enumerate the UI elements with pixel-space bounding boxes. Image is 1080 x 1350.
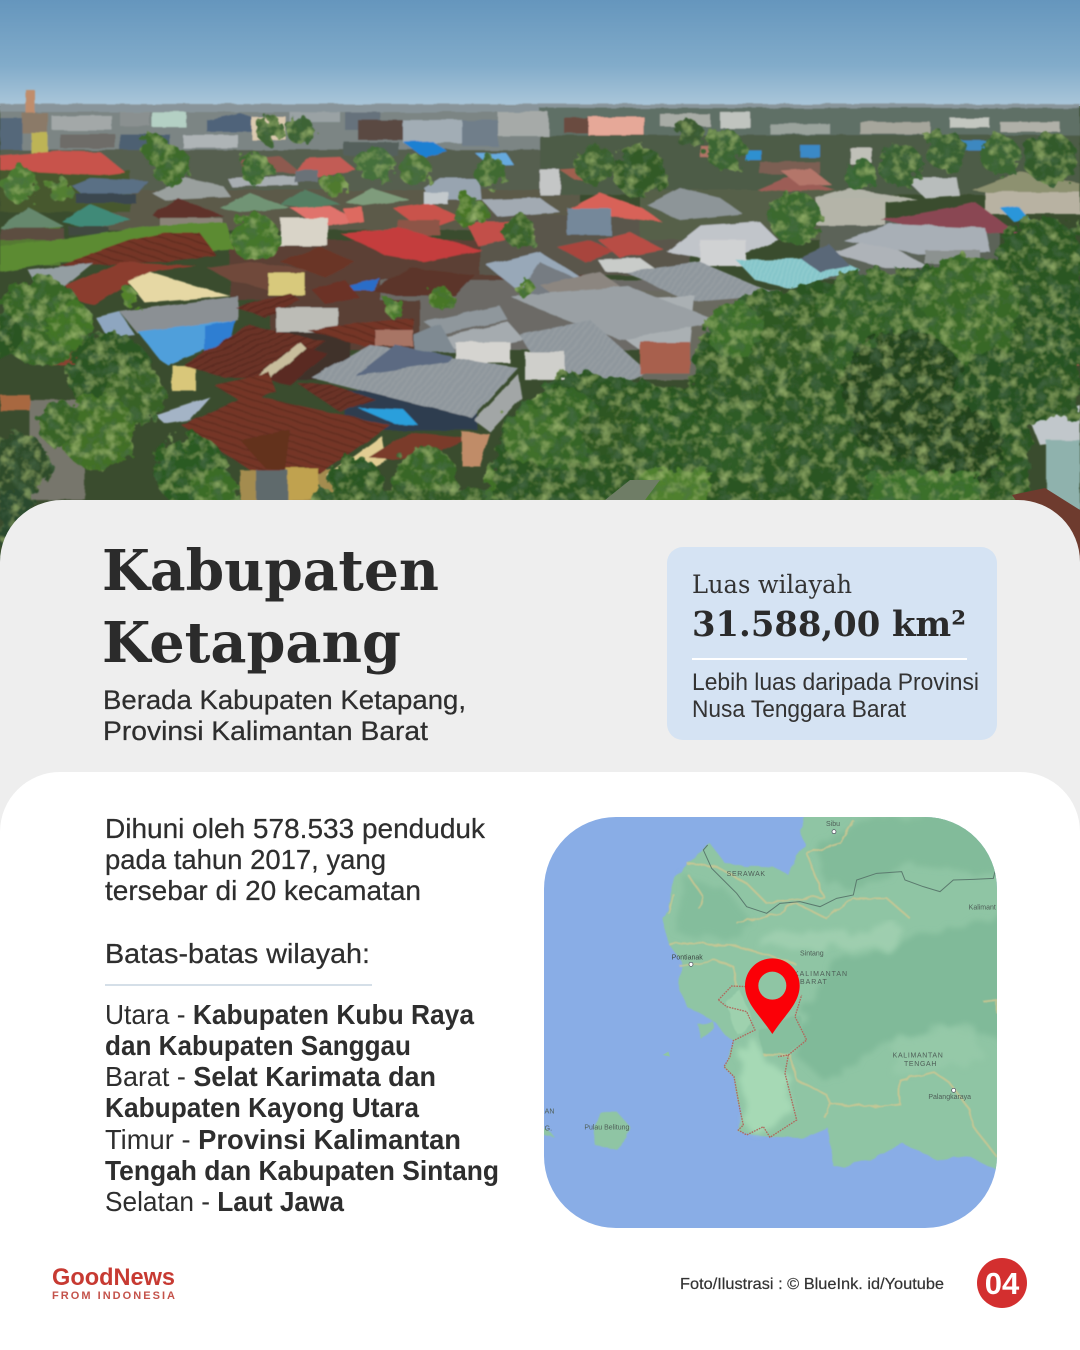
map labels: G. bbox=[545, 1126, 552, 1133]
map labels: Sintang bbox=[800, 950, 824, 957]
map labels: KALIMANTAN bbox=[893, 1052, 943, 1059]
callout: area: Luas wilayah bbox=[692, 570, 852, 599]
text block: borders list: dan Kabupaten Sanggau bbox=[105, 1030, 411, 1061]
title bbox=[102, 538, 439, 676]
map labels: Pulau Belitung bbox=[584, 1124, 629, 1131]
map labels: KALIMANTAN bbox=[794, 971, 848, 978]
large grey roof bbox=[345, 390, 477, 430]
text block: population: tersebar di 20 kecamatan bbox=[105, 875, 421, 906]
upper brown roofs bbox=[183, 325, 327, 378]
page number: 04 bbox=[985, 1266, 1020, 1301]
page number bbox=[977, 1258, 1027, 1308]
mid roofs, left bbox=[57, 233, 217, 266]
photo credit: Foto/Ilustrasi : © BlueInk. id/Youtube bbox=[680, 1276, 944, 1293]
callout: area bbox=[667, 547, 997, 740]
title: Ketapang bbox=[102, 610, 401, 676]
map labels: Pontianak bbox=[672, 954, 703, 961]
subtitle: Provinsi Kalimantan Barat bbox=[103, 716, 429, 746]
mid roofs, centre and right bbox=[485, 251, 580, 289]
text block: borders list: Kabupaten Kayong Utara bbox=[105, 1092, 419, 1123]
subtitle: Berada Kabupaten Ketapang, bbox=[103, 685, 466, 715]
map labels bbox=[545, 821, 996, 1133]
heading: borders: Batas-batas wilayah: bbox=[105, 938, 370, 969]
country border bbox=[703, 845, 995, 913]
map labels: BARAT bbox=[800, 979, 828, 986]
text block: population: pada tahun 2017, yang bbox=[105, 844, 386, 875]
left trees bbox=[0, 278, 86, 366]
map labels: TENGAH bbox=[904, 1061, 937, 1068]
map labels: Kalimant bbox=[969, 904, 996, 911]
callout: area: Lebih luas daripada Provinsi bbox=[692, 669, 979, 696]
land mass bbox=[540, 807, 1014, 1173]
title: Kabupaten bbox=[102, 538, 439, 604]
map labels: Sibu bbox=[826, 821, 840, 828]
filler between houses bbox=[0, 150, 600, 190]
logo: FROM INDONESIA bbox=[52, 1290, 175, 1302]
callout: area: 31.588,00 km² bbox=[692, 604, 966, 645]
icon: location pin bbox=[745, 958, 800, 1034]
map bbox=[540, 807, 1014, 1228]
far city band bbox=[0, 102, 1080, 114]
map labels: SERAWAK bbox=[727, 871, 766, 878]
panel: details bbox=[0, 772, 1080, 1350]
text block: borders list: Tengah dan Kabupaten Sintang bbox=[105, 1155, 499, 1186]
regency dotted boundary bbox=[718, 986, 807, 1137]
far houses bbox=[0, 170, 130, 212]
road and lawn details bbox=[605, 480, 660, 500]
logo: GoodNews bbox=[52, 1264, 175, 1291]
light regency area bbox=[737, 1043, 788, 1130]
subtitle bbox=[103, 685, 466, 746]
text block: borders list bbox=[105, 999, 499, 1217]
field bbox=[0, 222, 235, 272]
text block: borders list: Barat - Selat Karimata dan bbox=[105, 1061, 436, 1092]
roads bbox=[668, 820, 997, 1157]
map labels: AN bbox=[545, 1108, 554, 1115]
callout: area: Nusa Tenggara Barat bbox=[692, 696, 906, 723]
blue home bbox=[96, 312, 135, 338]
panel: title area bbox=[0, 500, 1080, 840]
text block: borders list: Timur - Provinsi Kalimantan bbox=[105, 1124, 461, 1155]
text block: borders list: Selatan - Laut Jawa bbox=[105, 1186, 344, 1217]
text block: population: Dihuni oleh 578.533 penduduk bbox=[105, 813, 486, 844]
lower brown roofs bbox=[155, 397, 210, 424]
text block: borders list: Utara - Kabupaten Kubu Raya bbox=[105, 999, 474, 1030]
map labels: Palangkaraya bbox=[928, 1094, 971, 1101]
right-edge houses bbox=[1030, 405, 1080, 445]
right tree mass bbox=[490, 220, 1080, 520]
small trees among houses bbox=[150, 145, 190, 185]
photo: aerial view of Ketapang rooftops bbox=[0, 0, 1080, 576]
centre grey cluster bbox=[626, 294, 694, 350]
dark interior bbox=[796, 918, 997, 1079]
text block: population bbox=[105, 813, 486, 906]
